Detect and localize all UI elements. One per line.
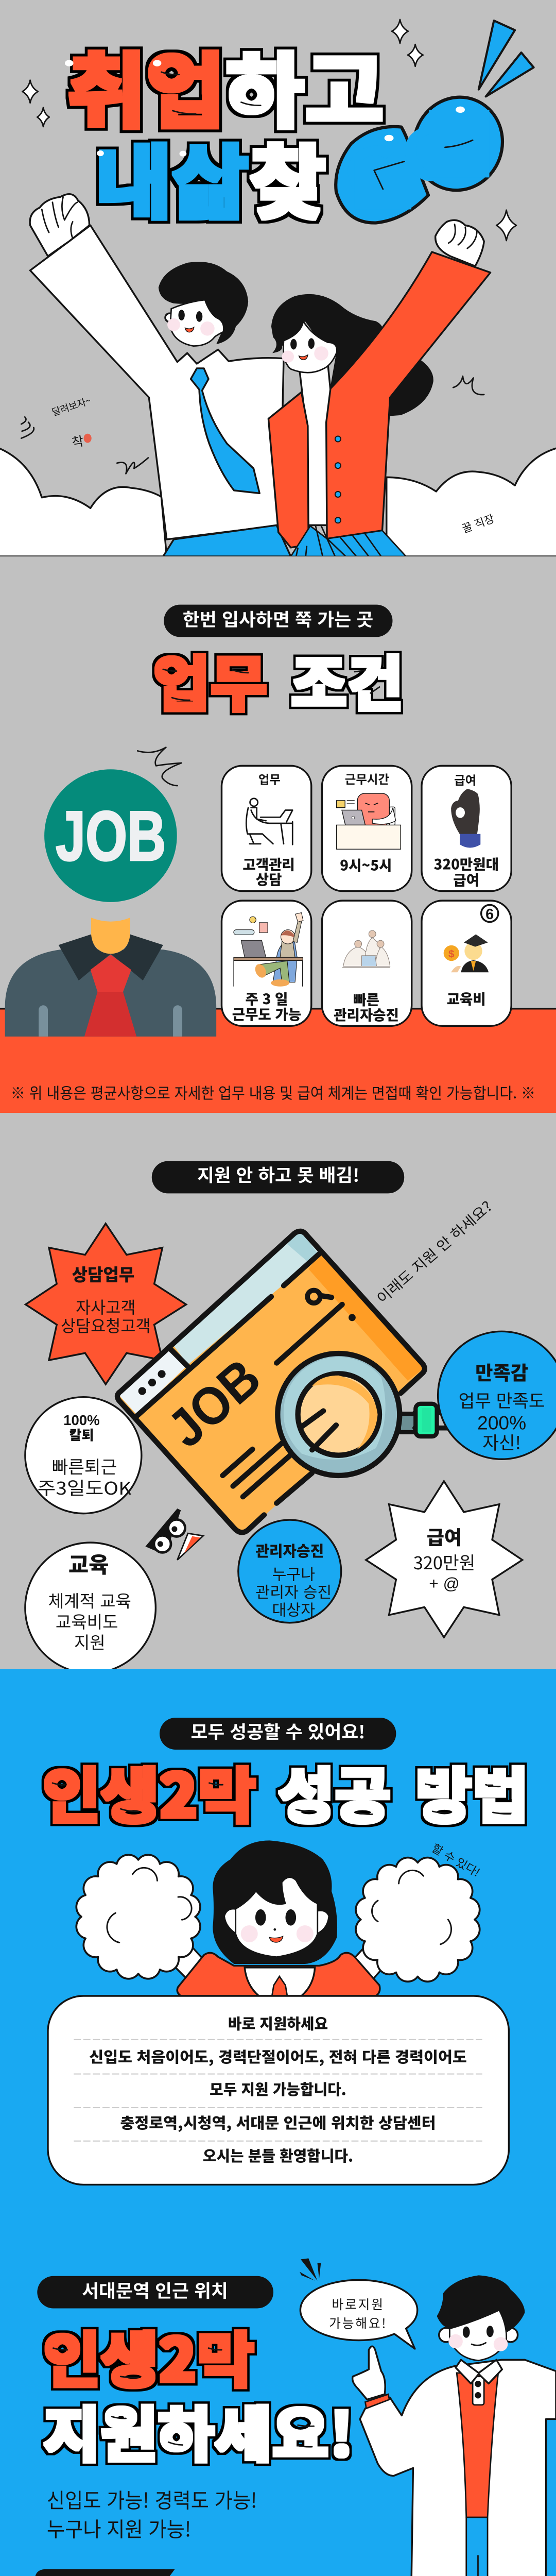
document shade: [308, 1253, 424, 1381]
card: job type: 상담: [256, 868, 282, 889]
handwriting: lets run: 달려보자~: [50, 393, 93, 419]
pointing hand: [353, 2346, 385, 2400]
badge: early leave: 빠른퇴근: [52, 1453, 117, 1479]
title: second act success: 인생2막: [43, 1748, 256, 1835]
collar: [245, 1968, 315, 1996]
text: who can apply: [47, 2484, 257, 2543]
title: second act success: 성공: [278, 1748, 391, 1835]
speech bubble: 가능해요!: [329, 2313, 387, 2332]
title: work conditions: 업무: [153, 635, 267, 723]
icon: stretching worker: [234, 913, 303, 987]
collar: [456, 2360, 502, 2384]
card: three day week: 주 3 일: [246, 988, 288, 1008]
card: job type: 업무: [258, 770, 281, 788]
card: fast promotion: 빠른: [353, 989, 379, 1009]
card: hours: [322, 766, 412, 891]
section: hero: [0, 19, 556, 556]
section: success method: [0, 1669, 556, 2226]
title: second act: 인생2막: [43, 2312, 255, 2399]
card: apply now message: 신입도 처음이어도, 경력단절이어도, 전혀 다른 경력이어도: [89, 2045, 467, 2067]
title: job hunting: 취업하고: [66, 26, 384, 145]
man shirt: [30, 225, 284, 539]
man fist: [30, 194, 90, 256]
three dots: [138, 1370, 166, 1395]
icon: graduate: $: [448, 948, 455, 960]
badge number: [481, 905, 498, 923]
card: job type: 고객관리: [242, 853, 295, 874]
man facial features: [167, 310, 215, 336]
badge: satisfaction: 만족감: [475, 1358, 528, 1385]
title: second act success: 방법: [415, 1748, 529, 1835]
right pompom: [356, 1858, 480, 1981]
title highlights: [65, 60, 260, 157]
badge: early leave: 주3일도OK: [38, 1474, 132, 1500]
handwriting: dream job: 꿀 직장: [460, 510, 496, 536]
rotated caption: 이래도 지원 안 하세요?: [372, 1195, 496, 1308]
pill: everyone can succeed: 모두 성공할 수 있어요!: [191, 1718, 365, 1743]
badge: counseling star: 상담요청고객: [61, 1313, 151, 1337]
sparkles: [22, 20, 516, 241]
woman neck: [300, 365, 331, 525]
icon: angry face: [145, 1509, 203, 1560]
handwriting: whoops face: [70, 431, 92, 451]
hair: [213, 1840, 337, 1964]
body: [177, 1953, 380, 1996]
badge: promotion: [238, 1520, 341, 1623]
JOB label on document: JOB: [156, 1347, 272, 1459]
badge: salary star: + @: [429, 1574, 460, 1592]
section: benefits: [24, 1161, 556, 1669]
badge: early leave: 100%: [63, 1412, 100, 1428]
badge: promotion: 관리자 승진: [255, 1580, 332, 1602]
title: find my life: 내삶찾: [95, 118, 326, 235]
man tie: [191, 368, 259, 493]
left pompom: [76, 1855, 200, 1979]
card: apply now message: 오시는 분들 환영합니다.: [203, 2144, 353, 2166]
woman jacket: [268, 252, 491, 548]
icon: ok hand: [451, 789, 480, 848]
handwriting: whoops face: 착: [70, 431, 85, 451]
face: [236, 1877, 317, 1957]
badge: satisfaction: [438, 1331, 556, 1459]
facial features: [241, 1909, 314, 1942]
section: apply: [0, 2226, 556, 2576]
card: three day week: 근무도 가능: [232, 1003, 301, 1024]
shirt: [457, 2373, 498, 2517]
facial features: [448, 2326, 508, 2351]
cuff: [365, 2394, 389, 2409]
card: hours: 9시~5시: [340, 854, 392, 875]
card: apply now message: 모두 지원 가능합니다.: [210, 2078, 346, 2099]
illustration: job person: [5, 748, 216, 1037]
badge: early leave: 칼퇴: [69, 1425, 94, 1444]
title: GO: GO: [333, 102, 476, 225]
badge: salary star: [366, 1481, 523, 1637]
ribbon: how to apply: [35, 2569, 175, 2576]
ears: [224, 1909, 329, 1934]
title: work conditions: [153, 635, 404, 723]
card: salary: 320만원대: [434, 853, 499, 874]
pants: [466, 2517, 488, 2576]
section: work conditions: [0, 605, 556, 1113]
speech bubble: 바로지원: [332, 2295, 385, 2313]
badge: education: [25, 1543, 155, 1673]
pill: location: 서대문역 인근 위치: [82, 2277, 228, 2302]
woman face: [283, 321, 337, 372]
badge: promotion: 관리자승진: [255, 1539, 324, 1561]
icon: office team: [342, 930, 390, 968]
illustration: job document: [115, 1228, 450, 1535]
woman skirt: [291, 525, 406, 556]
coat: [360, 2360, 556, 2576]
text: who can apply: 누구나 지원 가능!: [47, 2513, 191, 2543]
badge number: 6: [485, 906, 494, 923]
badge: satisfaction: 200%: [477, 1412, 526, 1433]
sleeves: [39, 1005, 182, 1037]
card: apply now message: 바로 지원하세요: [228, 2012, 328, 2034]
man skirt: [163, 525, 291, 556]
card: three day week: [221, 901, 311, 1026]
arms: [170, 1944, 385, 1980]
pill: cant miss: [152, 1161, 404, 1193]
pill: everyone can succeed: [160, 1718, 396, 1750]
man face: [170, 300, 224, 346]
header bar: [172, 1228, 321, 1365]
icon: person at desk: [246, 799, 292, 844]
title highlights: [53, 2348, 314, 2447]
badge: education: 체계적 교육: [48, 1587, 131, 1612]
pill: location: [37, 2276, 273, 2308]
pill: easy to stay: [164, 605, 392, 637]
card: apply now message: [48, 1996, 509, 2184]
badge: salary star: 320만원: [413, 1549, 475, 1574]
badge: promotion: 대상자: [272, 1597, 315, 1620]
squiggle: [137, 748, 182, 786]
badge: counseling star: [26, 1224, 186, 1384]
badge: early leave: [25, 1397, 142, 1514]
hair: [437, 2275, 525, 2332]
card: fast promotion: [322, 901, 412, 1026]
tie: [272, 1976, 287, 1996]
illustration: cheering woman: [76, 1840, 480, 1996]
icon: grumpy chair desk: [337, 793, 401, 849]
magnifier: [277, 1353, 399, 1476]
title: GO: [333, 84, 515, 225]
icon: rays: [300, 2258, 321, 2281]
title: apply: 지원하세요!: [43, 2386, 354, 2474]
pants crease: [477, 2556, 479, 2576]
title: work conditions: 조건: [291, 635, 404, 723]
card: salary: 급여: [453, 869, 479, 889]
illustration: man: [30, 194, 291, 556]
collar: [59, 935, 163, 980]
icon: blue rays: [479, 21, 534, 96]
card: salary: 급여: [454, 771, 476, 788]
head circle: [44, 769, 177, 902]
pill: easy to stay: 한번 입사하면 쭉 가는 곳: [183, 605, 373, 631]
badge: counseling star: 자사고객: [76, 1295, 136, 1318]
card: salary: [422, 766, 511, 891]
pill: cant miss: 지원 안 하고 못 배김!: [197, 1161, 359, 1187]
title: second act success: [43, 1748, 529, 1835]
handwriting: we can do it: 할 수 있다!: [429, 1839, 483, 1880]
card: fast promotion: 관리자승진: [334, 1004, 399, 1024]
speech bubble: [300, 2280, 418, 2349]
woman fist: [436, 220, 484, 266]
badge: education: 교육비도: [56, 1608, 118, 1633]
clouds: [0, 448, 556, 556]
badge: satisfaction: 업무 만족도: [459, 1387, 545, 1413]
decoration squiggles: [21, 376, 484, 474]
icon: graduate: [444, 935, 489, 972]
placket: [473, 2377, 484, 2405]
card: education: 교육비: [447, 988, 486, 1008]
magnifier handle: [399, 1404, 450, 1436]
document lines: [117, 1231, 425, 1532]
card: hours: 근무시간: [345, 770, 389, 787]
shoulders: [5, 950, 216, 1037]
document body: [115, 1228, 427, 1535]
illustration: woman: [268, 220, 491, 556]
man hair: [159, 262, 248, 344]
face and ears: [439, 2310, 518, 2361]
JOB label: JOB: [56, 797, 166, 875]
woman facial features: [282, 338, 328, 363]
badge: counseling star: 상담업무: [72, 1261, 134, 1286]
woman hair: [271, 294, 433, 419]
badge: satisfaction: 자신!: [482, 1429, 521, 1454]
text: who can apply: 신입도 가능! 경력도 가능!: [47, 2484, 257, 2514]
jacket buttons: [335, 436, 341, 523]
illustration: man in coat: [353, 2275, 556, 2576]
neck: [91, 918, 130, 954]
badge: education: 지원: [74, 1629, 106, 1654]
card: education: [422, 901, 511, 1026]
card: job type: [221, 766, 311, 891]
tie: [91, 955, 131, 992]
man ear: [165, 313, 174, 322]
badge: education: 교육: [68, 1548, 109, 1580]
badge: promotion: 누구나: [272, 1562, 315, 1584]
card: apply now message: 충정로역,시청역, 서대문 인근에 위치한 상담센터: [120, 2111, 436, 2133]
badge: salary star: 급여: [427, 1522, 462, 1550]
